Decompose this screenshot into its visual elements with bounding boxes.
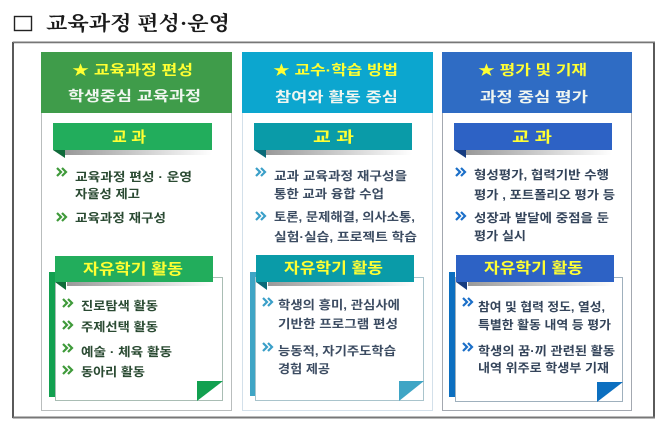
free semester note bbox=[449, 255, 623, 402]
free semester note: 동아리 활동 bbox=[81, 365, 145, 379]
subject ribbon: 교 과 bbox=[512, 129, 552, 146]
subject list: 실험·실습, 프로젝트 학습 bbox=[274, 229, 417, 244]
panel header: ★ 교육과정 편성 bbox=[72, 62, 193, 78]
subject ribbon: 교 과 bbox=[313, 129, 354, 146]
subject list: 형성평가, 협력기반 수행 bbox=[474, 167, 609, 182]
free semester note: 자유학기 활동 bbox=[484, 260, 583, 277]
subject list: 평가 , 포트폴리오 평가 등 bbox=[474, 187, 615, 202]
free semester note: 자유학기 활동 bbox=[284, 260, 383, 277]
free semester note: 예술 · 체육 활동 bbox=[81, 345, 172, 359]
panel: teaching and learning methods bbox=[242, 52, 433, 410]
panel header bbox=[442, 52, 632, 113]
panel header bbox=[41, 52, 232, 113]
free semester note bbox=[250, 255, 424, 401]
subject list: 교육과정 편성 · 운영 bbox=[75, 169, 192, 184]
free semester note: 경험 제공 bbox=[278, 361, 330, 376]
free semester note bbox=[49, 256, 223, 401]
free semester note: 진로탐색 활동 bbox=[81, 299, 158, 313]
subject list: 평가 실시 bbox=[474, 228, 526, 243]
subject ribbon bbox=[53, 123, 212, 158]
subject list bbox=[456, 167, 615, 243]
subject ribbon bbox=[254, 123, 412, 158]
panel header: 과정 중심 평가 bbox=[480, 89, 588, 105]
panel header: 학생중심 교육과정 bbox=[68, 88, 201, 104]
free semester note: 주제선택 활동 bbox=[81, 319, 158, 334]
title: 교육과정 편성·운영 bbox=[46, 11, 230, 35]
panel: assessment and records bbox=[442, 52, 632, 410]
subject list: 통한 교과 융합 수업 bbox=[274, 186, 384, 201]
panel header bbox=[242, 52, 433, 113]
free semester note: 능동적, 자기주도학습 bbox=[278, 343, 396, 358]
subject ribbon: 교 과 bbox=[112, 129, 146, 146]
panel header: 참여와 활동 중심 bbox=[275, 89, 398, 105]
free semester note: 학생의 꿈·끼 관련된 활동 bbox=[478, 343, 615, 358]
free semester note: 특별한 활동 내역 등 평가 bbox=[478, 317, 611, 332]
subject list bbox=[57, 168, 192, 225]
free semester note: 참여 및 협력 정도, 열성, bbox=[478, 299, 605, 314]
subject list: 교과 교육과정 재구성을 bbox=[274, 168, 407, 183]
free semester note: 기반한 프로그램 편성 bbox=[278, 316, 398, 331]
panel: curriculum organisation bbox=[41, 52, 232, 410]
subject list: 토론, 문제해결, 의사소통, bbox=[274, 209, 415, 224]
panel header: ★ 평가 및 기재 bbox=[478, 62, 587, 78]
subject list bbox=[256, 168, 417, 244]
free semester note: 학생의 흥미, 관심사에 bbox=[278, 297, 400, 312]
subject ribbon bbox=[454, 123, 612, 158]
subject list: 자율성 제고 bbox=[75, 186, 140, 201]
panel header: ★ 교수·학습 방법 bbox=[273, 62, 398, 78]
subject list: 교육과정 재구성 bbox=[75, 210, 166, 225]
free semester note: 자유학기 활동 bbox=[83, 261, 183, 278]
subject list: 성장과 발달에 중점을 둔 bbox=[474, 210, 609, 225]
free semester note: 내역 위주로 학생부 기재 bbox=[478, 360, 609, 375]
